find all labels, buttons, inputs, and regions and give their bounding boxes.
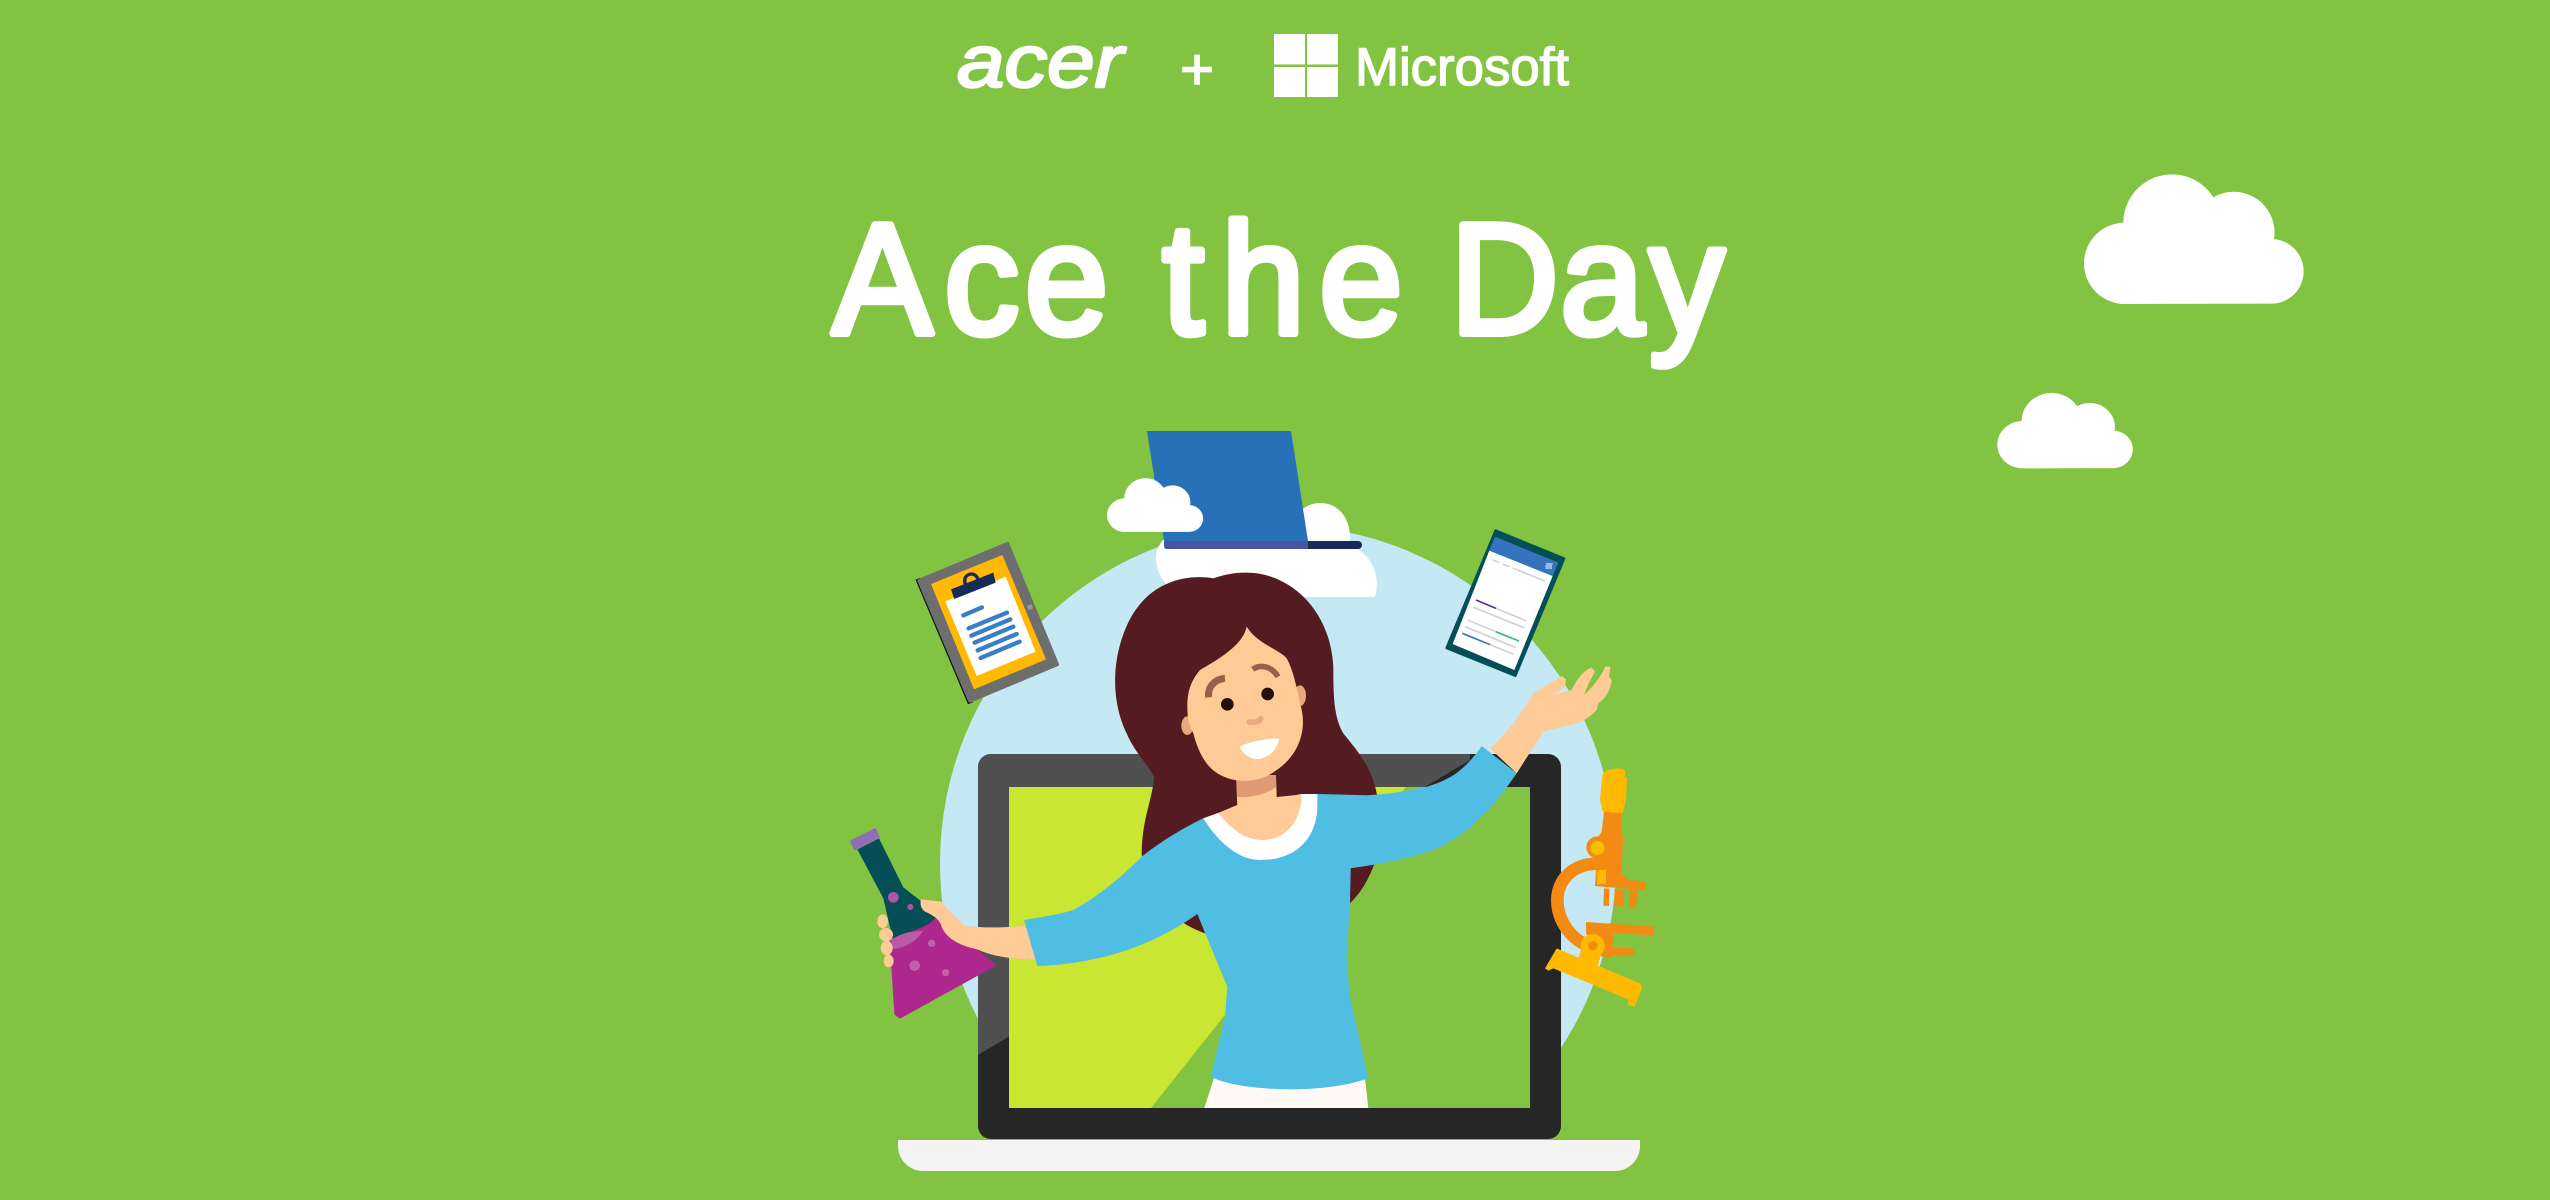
- infographic canvas: [829, 34, 2304, 1171]
- icon: Microsoft four-pane logo: [1274, 34, 1338, 97]
- Microsoft wordmark: Microsoft: [1355, 38, 1569, 97]
- icon: phone with document: [1447, 531, 1564, 676]
- head: [1181, 627, 1306, 781]
- icon: microscope: [1545, 769, 1654, 1007]
- mouth: [1239, 739, 1279, 759]
- icon: clipboard tablet: [916, 544, 1057, 703]
- neck shadow: [1236, 775, 1276, 797]
- hair: [1115, 573, 1381, 933]
- trousers: [1204, 1078, 1368, 1108]
- flask: [852, 830, 992, 1016]
- illustration: student juggling school items from a laptop: [852, 431, 1654, 1200]
- collar: [1203, 794, 1317, 860]
- shirt: [1024, 746, 1517, 1089]
- cloud: small top right: [1997, 393, 2133, 468]
- right forearm and hand: [1490, 667, 1612, 773]
- left forearm, hand and fingers: [877, 899, 1038, 967]
- cloud: small over blue laptop: [1107, 478, 1203, 532]
- logo row: acer + Microsoft: [957, 20, 1569, 103]
- screen frame: [978, 754, 1561, 1139]
- plus sign: +: [1180, 37, 1214, 102]
- icon: blue laptop floating above: [1147, 431, 1362, 549]
- nose: [1249, 719, 1261, 722]
- character: student: [852, 573, 1612, 1108]
- eyebrows: [1209, 678, 1225, 697]
- title: Ace the Day: [832, 190, 1724, 367]
- eyes: [1221, 698, 1234, 711]
- cloud: large top right: [2084, 174, 2304, 304]
- frame gloss: [978, 754, 1470, 1055]
- face: [1187, 627, 1303, 781]
- right ear: [1294, 685, 1306, 706]
- left ear: [1181, 716, 1193, 735]
- laptop screen: [978, 754, 1561, 1139]
- screen interior lime facet: [1009, 787, 1406, 1108]
- screen interior green: [1009, 787, 1530, 1108]
- background circle: [940, 532, 1615, 1048]
- cloud: large behind hair: [1156, 503, 1377, 597]
- chest skin: [1218, 775, 1302, 840]
- laptop base: [898, 1140, 1640, 1171]
- acer logo wordmark: acer: [957, 20, 1127, 103]
